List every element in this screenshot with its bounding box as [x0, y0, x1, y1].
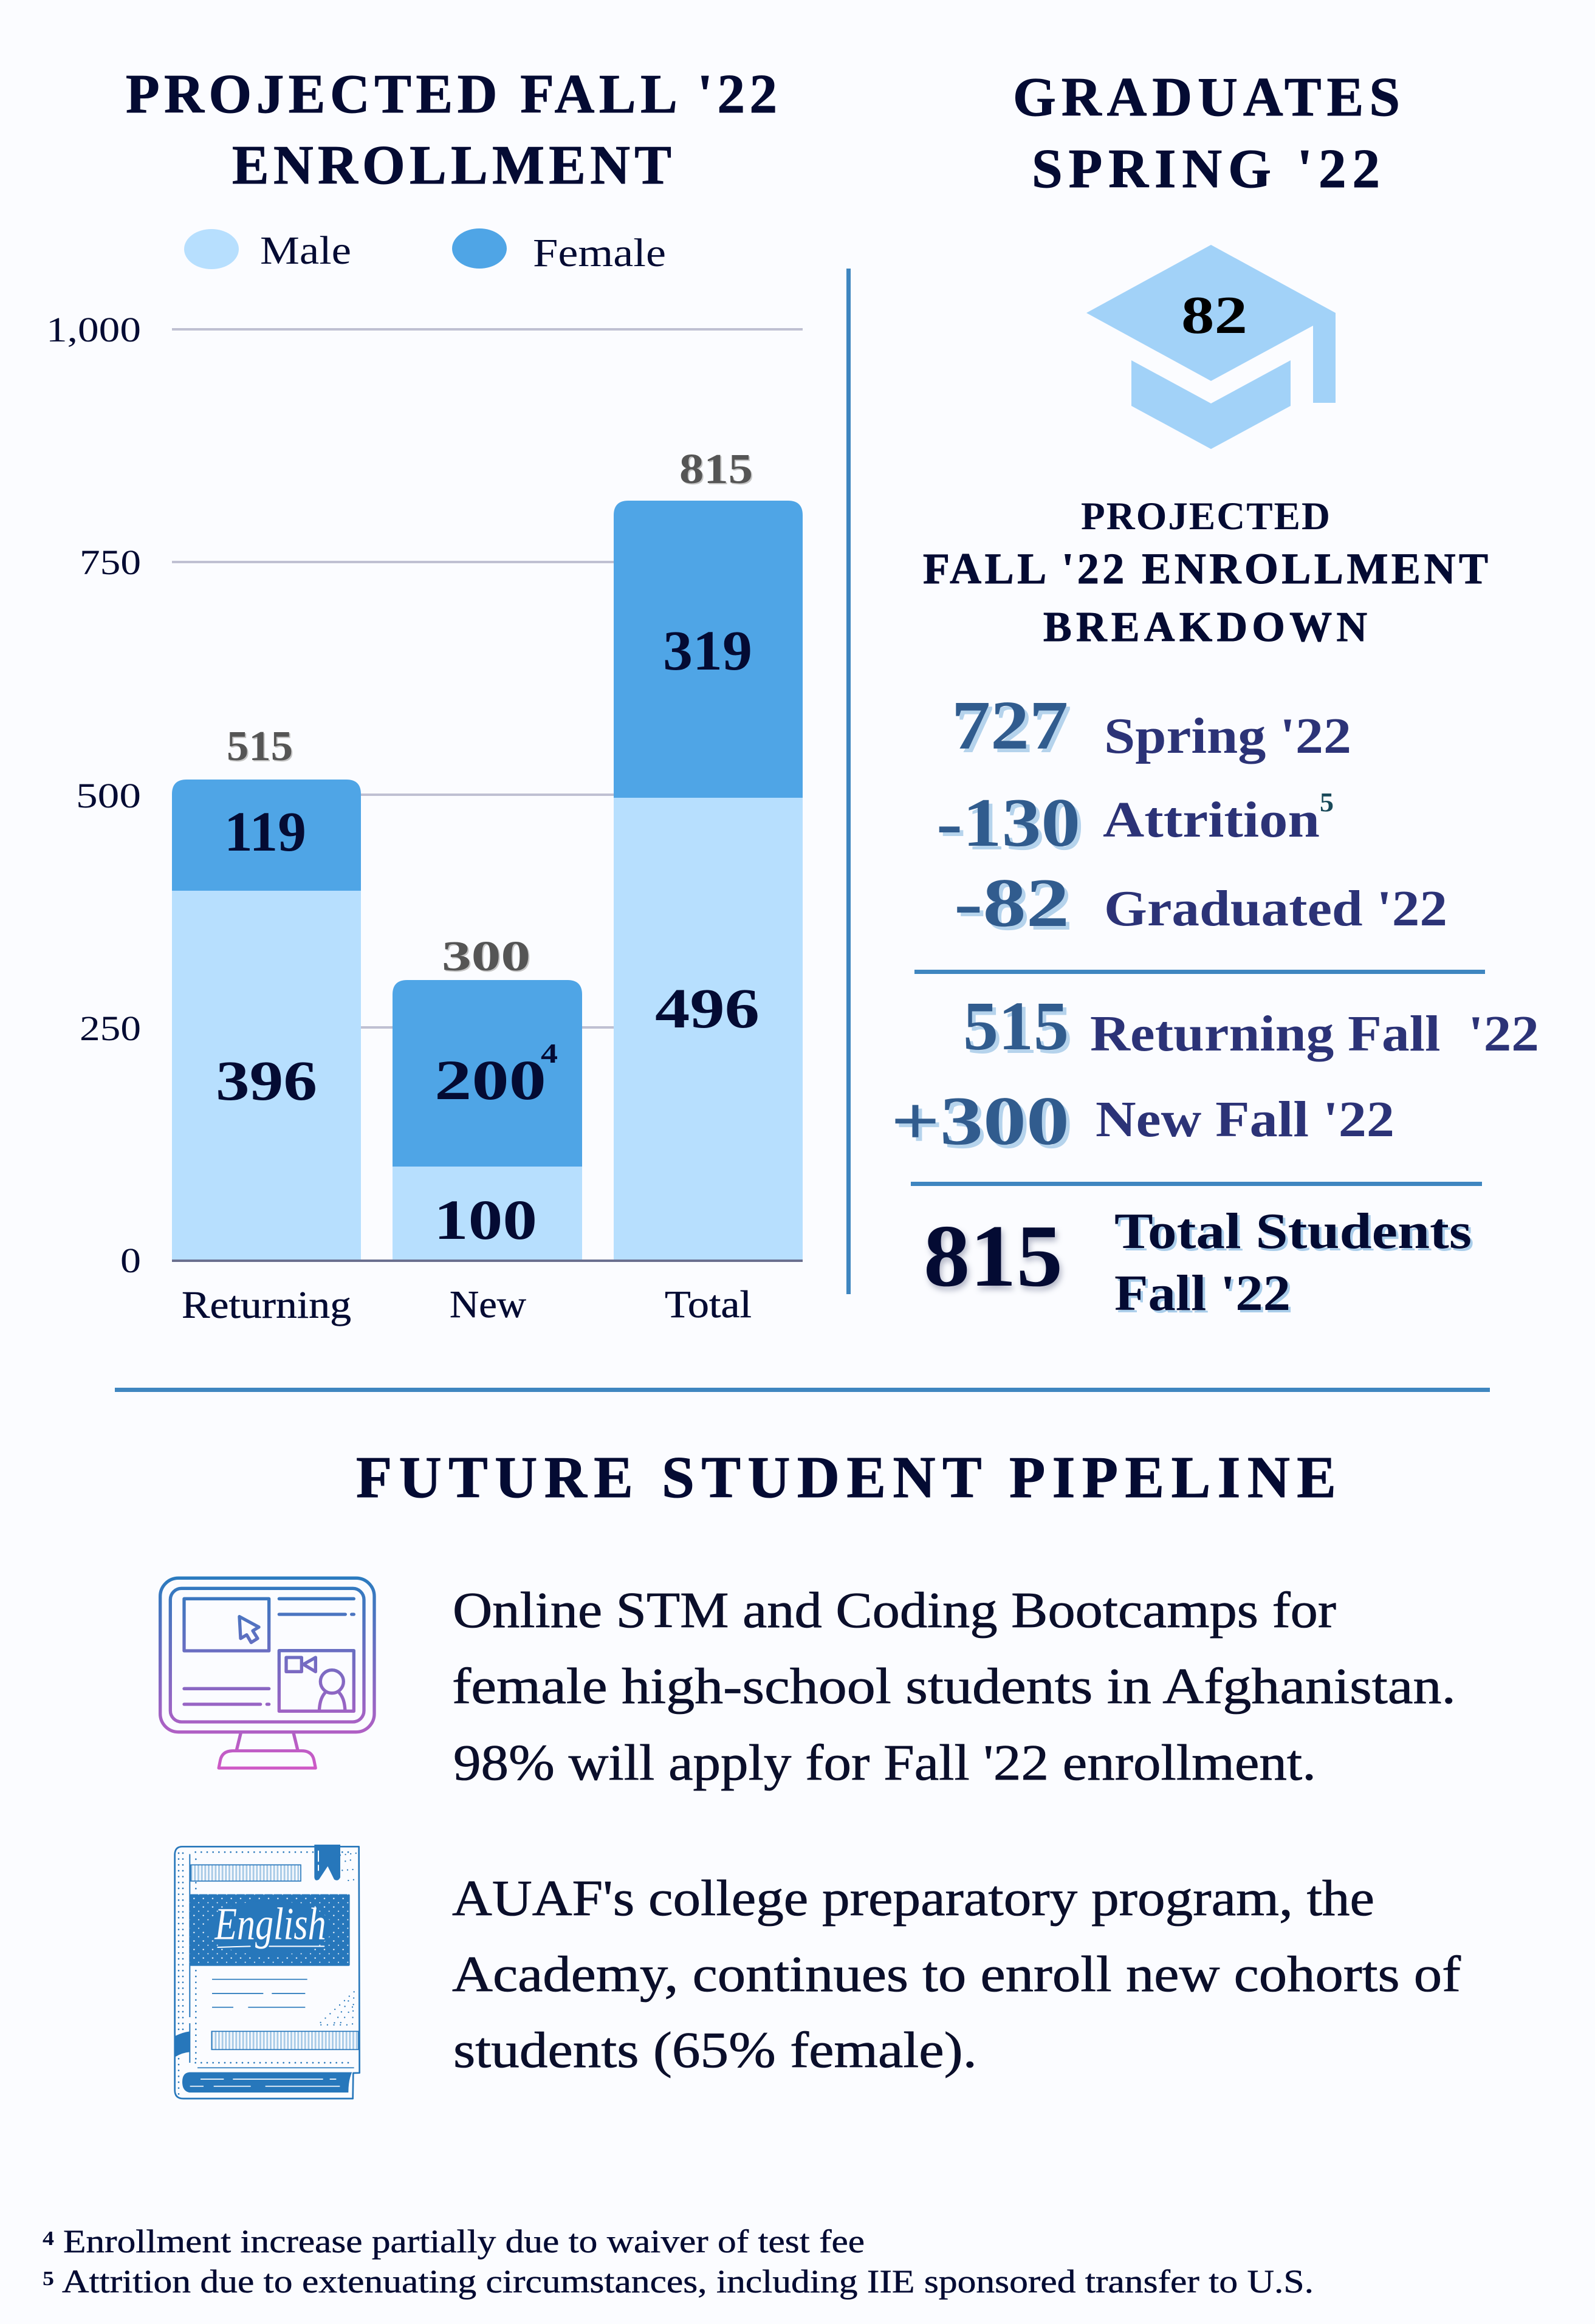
bar: new: 200	[434, 1049, 546, 1112]
gridlines and y axis labels: 0	[120, 1241, 141, 1280]
icon: english book	[175, 1845, 360, 2099]
footnotes	[43, 2223, 1314, 2300]
text: academy: students (65% female).	[453, 2022, 977, 2079]
breakdown: graduated -82: -82	[954, 864, 1069, 941]
breakdown: attrition -130: -130	[936, 784, 1080, 861]
bar: total: 496	[655, 978, 760, 1040]
graduates heading: SPRING '22	[1032, 138, 1380, 199]
text: english cover title: English	[214, 1899, 326, 1950]
graduates heading: GRADUATES	[1013, 66, 1400, 128]
chart title: ENROLLMENT	[232, 134, 671, 196]
bar: new: 100	[434, 1189, 537, 1252]
bar: total: 319	[663, 620, 752, 682]
bar: new: 4	[541, 1038, 558, 1069]
x axis labels: New	[450, 1283, 526, 1326]
icon: computer monitor with online class	[160, 1578, 374, 1768]
bar: new: 300	[442, 933, 530, 980]
text: bootcamps: 98% will apply for Fall '22 enrollment.	[453, 1735, 1316, 1791]
footnotes: Attrition due to extenuating circumstances, including IIE sponsored transfer to U.S.	[62, 2263, 1314, 2300]
gridlines and y axis labels: 1,000	[46, 310, 141, 349]
footnotes: 5	[43, 2267, 54, 2290]
breakdown: graduated -82	[954, 864, 1447, 941]
x axis labels: Returning	[182, 1283, 351, 1326]
pipeline heading: FUTURE STUDENT PIPELINE	[356, 1445, 1336, 1510]
gridlines and y axis labels: 750	[80, 543, 141, 582]
breakdown: new +300: +300	[891, 1082, 1069, 1159]
breakdown heading: BREAKDOWN	[1043, 604, 1367, 651]
legend	[184, 228, 666, 275]
breakdown: attrition -130: 5	[1320, 787, 1334, 817]
total students 815: 815	[924, 1207, 1063, 1305]
chart title	[126, 63, 777, 196]
footnotes: Enrollment increase partially due to waiver of test fee	[63, 2223, 865, 2260]
breakdown: spring 727: Spring '22	[1104, 708, 1351, 764]
gridlines and y axis labels: 500	[76, 776, 141, 815]
bar: new	[393, 933, 582, 1261]
breakdown: graduated -82: Graduated '22	[1104, 880, 1447, 937]
footnotes: 4	[43, 2227, 54, 2250]
breakdown: returning 515: 515	[963, 987, 1069, 1064]
breakdown heading	[923, 495, 1488, 651]
bar: returning: 119	[224, 801, 306, 863]
breakdown: returning 515: Returning Fall '22	[1090, 1006, 1539, 1062]
panel: future student pipeline	[160, 1445, 1461, 2099]
breakdown: returning 515	[963, 987, 1539, 1064]
total students 815: Total Students	[1114, 1203, 1472, 1260]
breakdown heading: FALL '22 ENROLLMENT	[923, 544, 1488, 593]
x axis labels	[182, 1283, 752, 1326]
text: academy	[452, 1870, 1461, 2079]
panel: graduates spring 22	[891, 66, 1539, 1321]
bar: returning: 515	[227, 723, 293, 770]
text: bootcamps: female high-school students in Afghanistan.	[452, 1658, 1456, 1715]
graduates heading	[1013, 66, 1400, 199]
bar: returning: 396	[216, 1050, 317, 1112]
gridlines and y axis labels	[46, 310, 803, 1280]
total students 815	[924, 1203, 1472, 1321]
bar: returning	[172, 723, 361, 1261]
breakdown: new +300	[891, 1082, 1394, 1159]
breakdown: attrition -130: Attrition	[1103, 792, 1320, 848]
x axis labels: Total	[665, 1283, 752, 1326]
total students 815: Fall '22	[1114, 1265, 1291, 1321]
breakdown: spring 727	[952, 687, 1351, 764]
text: bootcamps	[452, 1582, 1456, 1791]
legend: Male	[260, 228, 351, 273]
text: academy: Academy, continues to enroll new cohorts of	[452, 1946, 1461, 2003]
text: academy: AUAF's college preparatory program, the	[452, 1870, 1374, 1927]
breakdown: attrition -130	[936, 784, 1334, 861]
chart title: PROJECTED FALL '22	[126, 63, 777, 125]
bar: total	[614, 446, 803, 1261]
legend: Female	[533, 231, 666, 275]
panel: projected fall enrollment chart	[46, 63, 803, 1326]
gridlines and y axis labels: 250	[80, 1009, 141, 1048]
breakdown heading: PROJECTED	[1081, 495, 1330, 538]
text: bootcamps: Online STM and Coding Bootcamps for	[453, 1582, 1336, 1639]
icon: graduation cap with 82	[1086, 245, 1336, 449]
icon: graduation cap with 82: 82	[1181, 286, 1247, 345]
breakdown: spring 727: 727	[952, 687, 1068, 764]
breakdown: new +300: New Fall '22	[1096, 1091, 1394, 1148]
bar: total: 815	[679, 446, 753, 493]
